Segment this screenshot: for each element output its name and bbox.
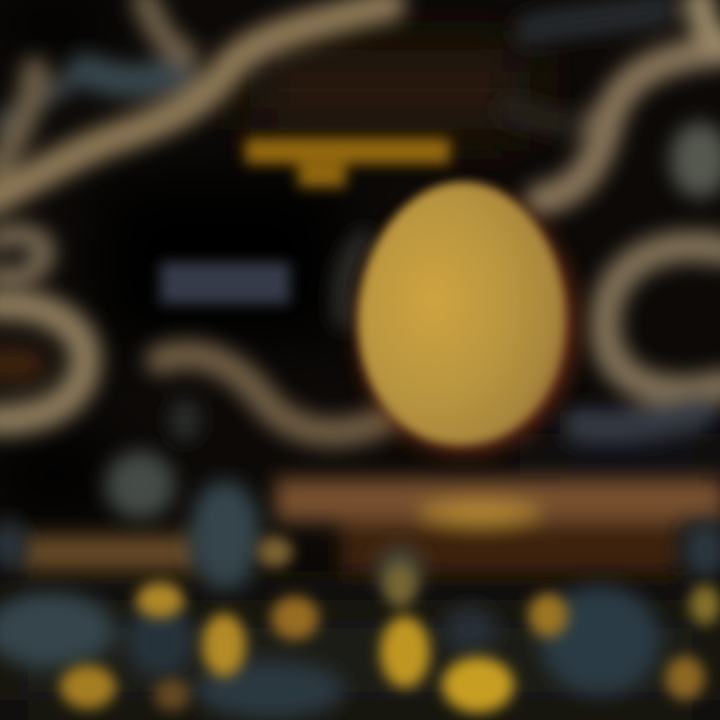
ribbon: center wave [160, 240, 385, 442]
golden egg [357, 182, 578, 455]
pedestal [20, 478, 720, 574]
ribbon: left coil [0, 304, 85, 420]
gold nuggets [60, 536, 720, 713]
ribbon: right coil [580, 246, 720, 427]
subtitle text, blurred grey [160, 262, 290, 304]
title text, blurred gold [245, 138, 450, 187]
dark rocks [0, 451, 720, 720]
ribbon: upper left swirl [0, 0, 390, 278]
ribbon: upper right swirl [510, 0, 720, 200]
